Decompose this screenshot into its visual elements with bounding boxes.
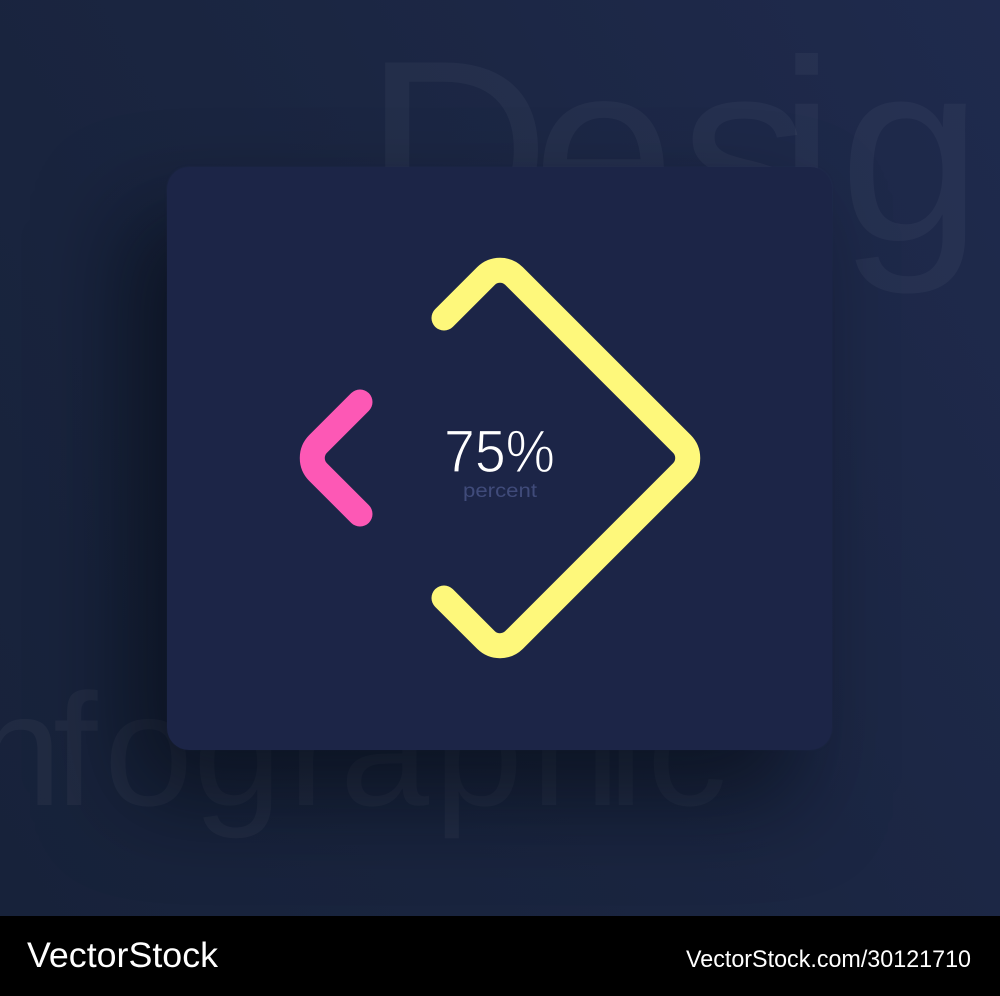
brand name: VectorStock <box>27 936 219 975</box>
yellow segment: 75% <box>444 270 688 646</box>
label: percent: percent <box>463 481 538 502</box>
card panel <box>167 167 832 750</box>
image reference: VectorStock.com/30121710 <box>686 946 971 973</box>
footer bar <box>0 916 1000 996</box>
background word: Design: Desig <box>364 6 982 296</box>
value: 75%: 75% <box>444 418 555 485</box>
pink segment: 25% <box>312 402 360 514</box>
